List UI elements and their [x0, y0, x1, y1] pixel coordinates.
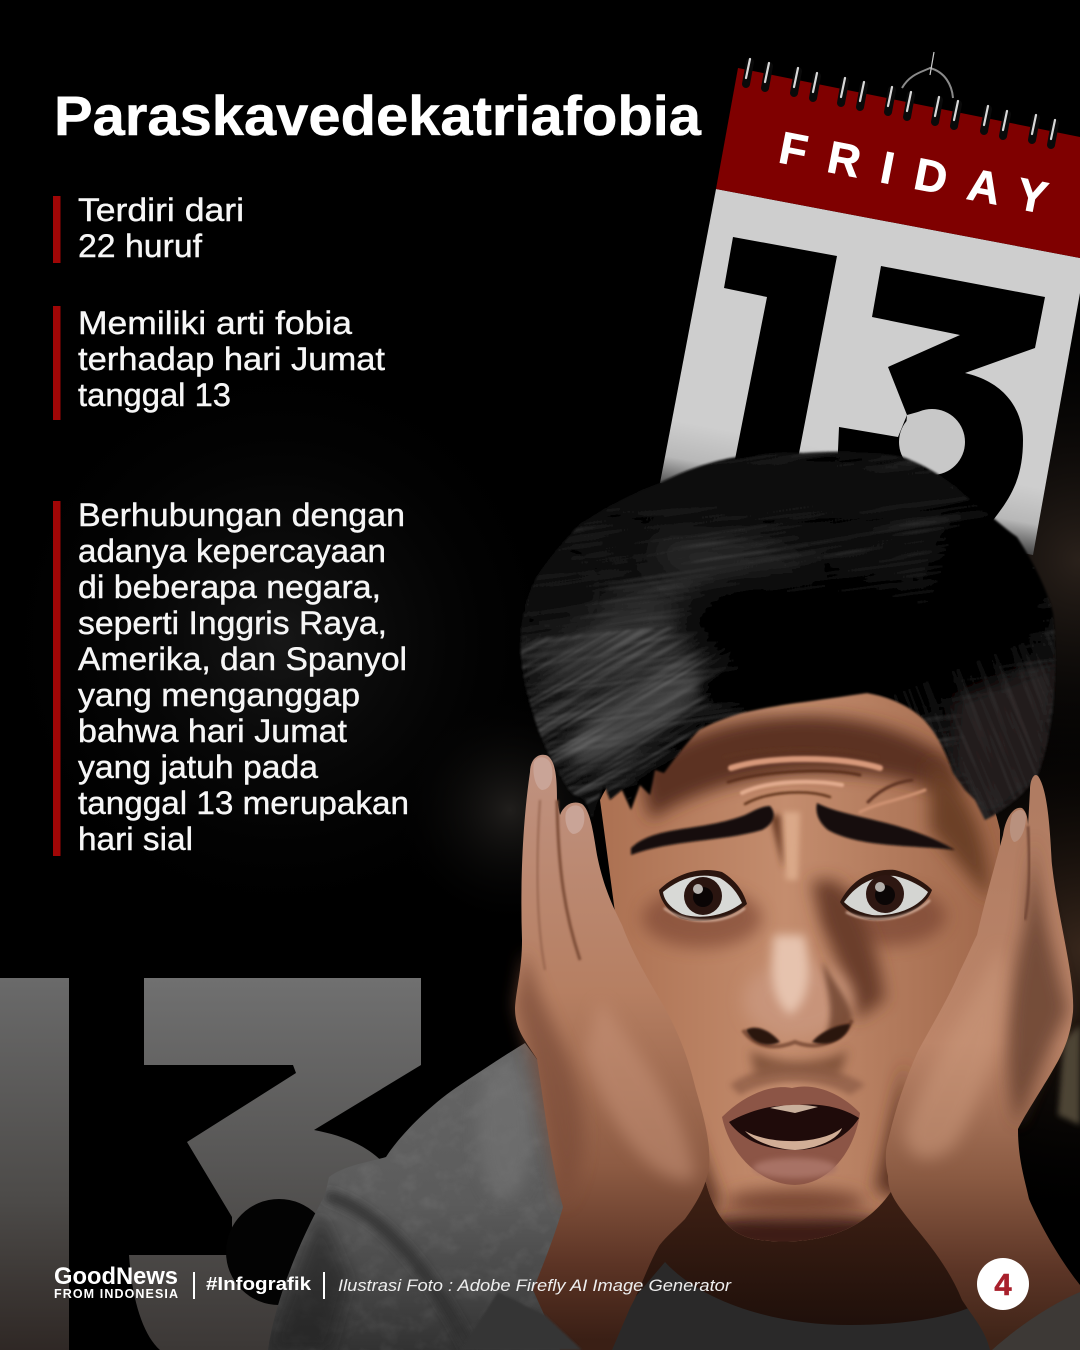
point 1: word length: Terdiri dari: [78, 192, 244, 228]
point 2: meaning: tanggal 13: [78, 377, 231, 413]
forehead wrinkles: [724, 749, 925, 812]
calendar numeral 1: [724, 237, 837, 500]
page number: [977, 1258, 1029, 1310]
fingernail: [1010, 810, 1026, 842]
nose side shadow: [812, 880, 885, 1020]
point 1: word length: 22 huruf: [78, 228, 202, 264]
hair shine: [520, 562, 746, 708]
sweater: [268, 1043, 563, 1350]
forehead shading: [640, 716, 960, 820]
shoulder right: [1058, 1025, 1080, 1125]
point 3: belief: Berhubungan dengan: [78, 497, 405, 533]
nose: [743, 935, 852, 1075]
right eyebrow: [816, 803, 955, 850]
left hand: [515, 755, 709, 1350]
sideburn: [950, 660, 1060, 825]
point 2: meaning: terhadap hari Jumat: [78, 341, 385, 377]
point 3: belief: yang menganggap: [78, 677, 360, 713]
calendar paper: [660, 189, 1080, 555]
person: [268, 450, 1080, 1350]
eye sockets: [642, 888, 762, 948]
logo: GoodNews: [54, 1263, 178, 1290]
left eyebrow: [631, 806, 774, 855]
spiral rings: [746, 59, 1055, 145]
mouth: [722, 1086, 860, 1185]
title: Paraskavedekatriafobia: [54, 84, 702, 147]
point 2: meaning: Memiliki arti fobia: [78, 305, 352, 341]
point 3: belief: bahwa hari Jumat: [78, 713, 347, 749]
point 3: belief: yang jatuh pada: [78, 749, 318, 785]
point 3: belief: seperti Inggris Raya,: [78, 605, 387, 641]
point 3: belief: [53, 497, 409, 857]
point 3: belief: Amerika, dan Spanyol: [78, 641, 407, 677]
right eye: [840, 870, 932, 920]
left eye: [659, 870, 747, 921]
brow bridge: [783, 812, 800, 880]
calendar red header: [716, 68, 1080, 258]
calendar hanger: [902, 52, 953, 98]
fringe tips shade: [596, 714, 730, 810]
page number: 4: [994, 1267, 1012, 1302]
calendar numeral 3: [835, 266, 1045, 530]
point 3: belief: tanggal 13 merupakan: [78, 785, 409, 821]
point 2: meaning: [53, 305, 385, 420]
sleeve left: [460, 1292, 582, 1350]
neck: [600, 1170, 990, 1340]
hair deep shadow: [668, 556, 1012, 724]
logo: FROM INDONESIA: [54, 1287, 178, 1301]
point 1: word length: [53, 192, 244, 264]
lower face shading: [716, 1206, 877, 1242]
face: [600, 690, 1000, 1257]
right hand: [886, 775, 1080, 1350]
point 3: belief: adanya kepercayaan: [78, 533, 386, 569]
t-shirt: [590, 1262, 1000, 1350]
sleeve right: [992, 1292, 1080, 1350]
fingernails: [533, 757, 552, 790]
hair: [520, 450, 1056, 821]
point 3: belief: di beberapa negara,: [78, 569, 381, 605]
ghost number 13: [0, 978, 450, 1350]
footer: [54, 1263, 732, 1301]
calendar text: FRIDAY: FRIDAY: [775, 122, 1052, 224]
calendar: [660, 52, 1080, 555]
hashtag: #Infografik: [206, 1273, 312, 1294]
moustache shadow: [730, 1066, 865, 1095]
photo credit: Ilustrasi Foto : Adobe Firefly AI Image Generator: [338, 1276, 732, 1295]
point 3: belief: hari sial: [78, 821, 193, 857]
